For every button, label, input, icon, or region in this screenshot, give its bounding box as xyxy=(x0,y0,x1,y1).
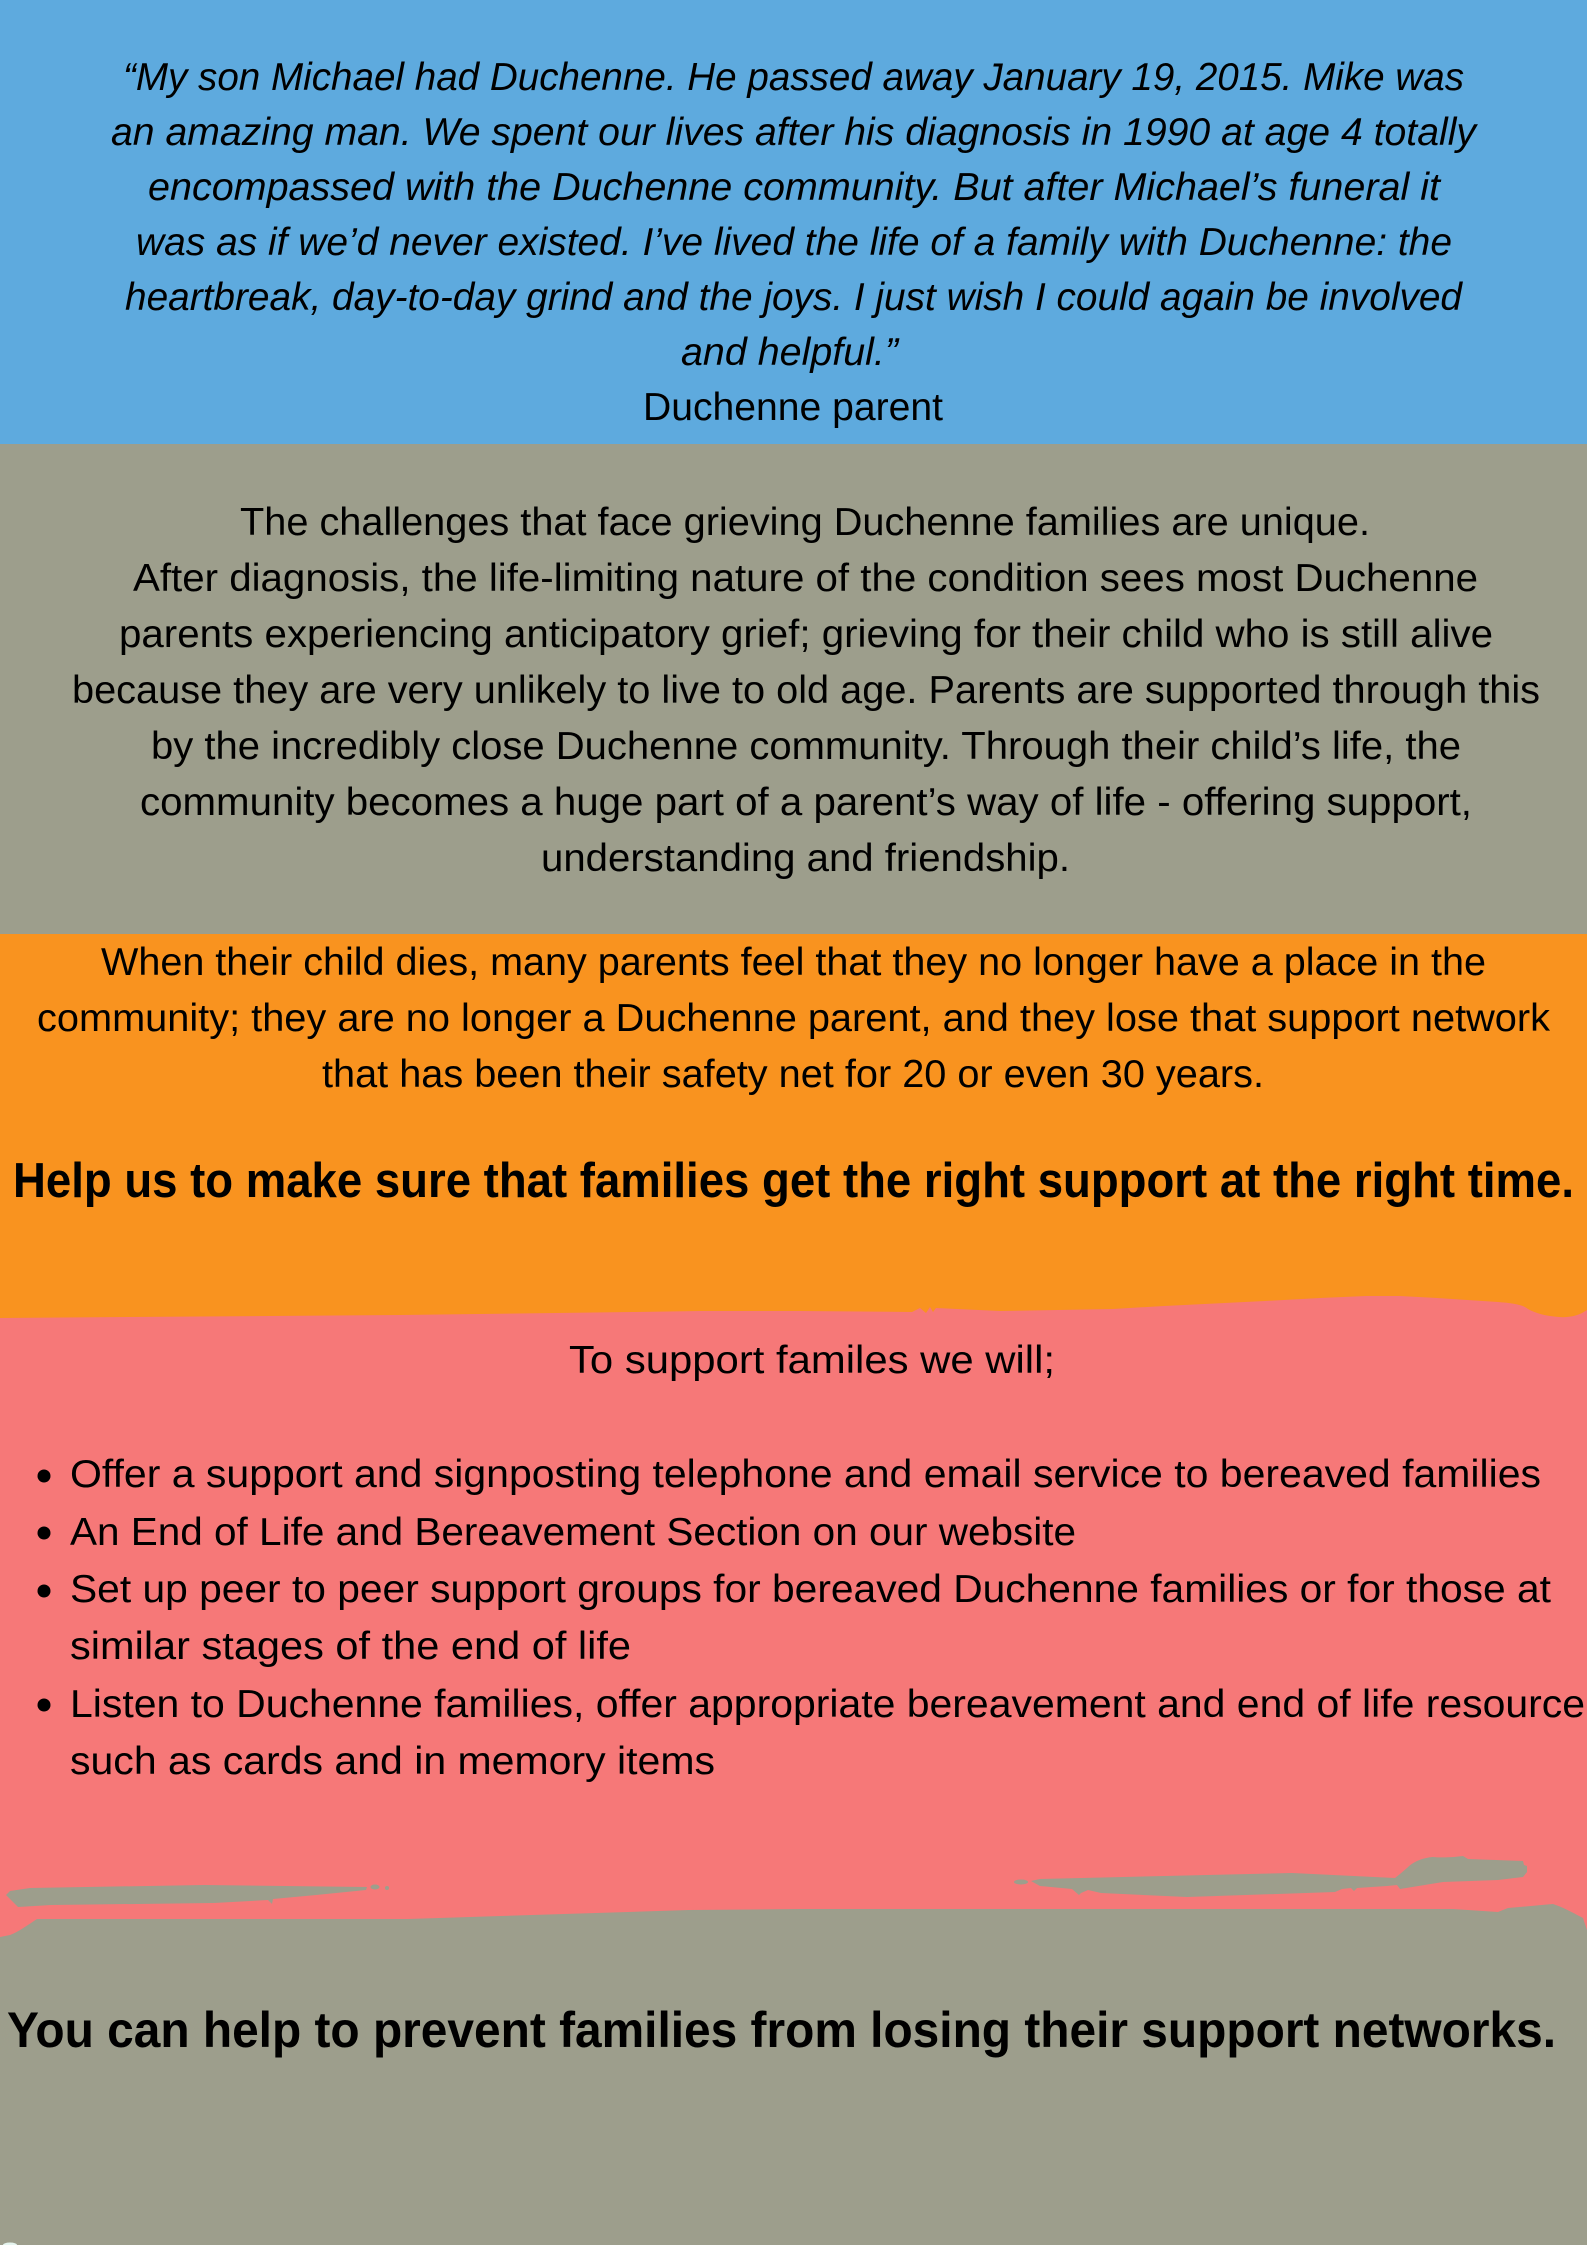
quote text: heartbreak, day-to-day grind and the joys. I just wish I could again be involved xyxy=(125,276,1463,319)
panel: orange call to action xyxy=(0,934,1587,1318)
list item: listening and resources: Listen to Duchenne families, offer appropriate bereavement and end of life resource xyxy=(70,1683,1585,1726)
quote text: “My son Michael had Duchenne. He passed away January 19, 2015. Mike was xyxy=(123,56,1464,99)
list item: peer support groups: Set up peer to peer support groups for bereaved Duchenne families or for those at xyxy=(70,1568,1551,1611)
quote text: an amazing man. We spent our lives after his diagnosis in 1990 at age 4 totally xyxy=(111,111,1478,154)
orange paragraph: community; they are no longer a Duchenne parent, and they lose that support network xyxy=(37,997,1551,1040)
orange paragraph: When their child dies, many parents feel that they no longer have a place in the xyxy=(101,941,1486,984)
panel: challenges xyxy=(0,444,1587,934)
challenges text: because they are very unlikely to live to old age. Parents are supported through this xyxy=(72,669,1540,712)
bottom background with torn edge xyxy=(0,1904,1587,2245)
panel: bottom call to action xyxy=(0,1904,1587,2245)
challenges text xyxy=(72,501,1540,880)
list item: peer support groups xyxy=(38,1568,1551,1668)
challenges background xyxy=(0,444,1587,934)
challenges text: by the incredibly close Duchenne community. Through their child’s life, the xyxy=(151,725,1461,768)
list item: listening and resources: such as cards and in memory items xyxy=(70,1740,715,1783)
challenges text: The challenges that face grieving Duchenne families are unique. xyxy=(240,501,1370,544)
challenges text: parents experiencing anticipatory grief; grieving for their child who is still alive xyxy=(119,613,1493,656)
quote text: was as if we’d never existed. I’ve lived the life of a family with Duchenne: the xyxy=(136,221,1452,264)
orange background with torn edge xyxy=(0,934,1587,1318)
challenges text: community becomes a huge part of a parent’s way of life - offering support, xyxy=(140,781,1472,824)
brush stroke left xyxy=(6,1884,389,1907)
quote attribution: Duchenne parent xyxy=(643,386,943,429)
orange paragraph xyxy=(37,941,1551,1096)
list intro: To support familes we will; xyxy=(569,1339,1055,1382)
orange paragraph: that has been their safety net for 20 or even 30 years. xyxy=(322,1053,1264,1096)
quote background xyxy=(0,0,1587,444)
brush stroke right xyxy=(1014,1856,1527,1897)
challenges text: understanding and friendship. xyxy=(541,837,1070,880)
quote text: and helpful.” xyxy=(681,331,900,374)
list item: listening and resources xyxy=(38,1683,1585,1783)
quote text xyxy=(111,56,1478,374)
panel: coral support list background xyxy=(0,1290,1587,1950)
challenges text: After diagnosis, the life-limiting nature of the condition sees most Duchenne xyxy=(133,557,1478,600)
list item: peer support groups: similar stages of the end of life xyxy=(70,1625,631,1668)
list item: website section: An End of Life and Bereavement Section on our website xyxy=(70,1511,1076,1554)
panel: quote xyxy=(0,0,1587,444)
small white mark at bottom left xyxy=(3,2242,17,2245)
bottom bold message: You can help to prevent families from losing their support networks. xyxy=(7,2002,1556,2058)
quote text: encompassed with the Duchenne community. But after Michael’s funeral it xyxy=(148,166,1442,209)
list item: telephone and email service: Offer a support and signposting telephone and email service to bereaved families xyxy=(70,1453,1541,1496)
panel: support list xyxy=(38,1339,1585,1783)
